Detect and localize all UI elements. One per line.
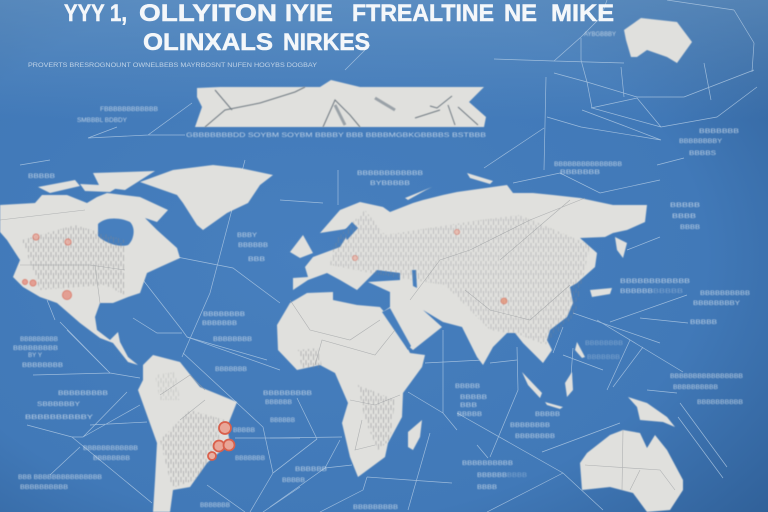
label group: north area: BBBBBB [238, 242, 268, 249]
continent: Sakhalin island [615, 237, 627, 258]
label group: indian ocean: BBBB [507, 472, 527, 479]
continent: Australia [580, 430, 683, 512]
continent: Arctic islands [38, 171, 155, 193]
continent: South America [138, 355, 237, 512]
label group: central column: BBBBB [233, 427, 255, 434]
marker: North America cluster [22, 234, 72, 300]
label group: right column: BBBBBBB [587, 354, 620, 361]
label group: north area: BBBBBBB [560, 169, 600, 176]
label group: north area: BBBBB [670, 202, 700, 209]
label group: left column: BBBBBBBBB [58, 390, 108, 397]
continent: British Isles [290, 235, 313, 258]
label group: right column: BBBBBBBBY [693, 300, 741, 307]
label group: right column: BBBBBBBBBB [673, 384, 718, 391]
label group: central column: BBBBBBB [215, 366, 247, 373]
label group: right column: BBBBB [653, 288, 683, 295]
title: IYIE [285, 0, 333, 27]
title: YYY 1, [64, 0, 127, 27]
label group: left column: BY Y [28, 352, 43, 359]
label group: north area: BBBBBBBBBBBB [357, 170, 423, 177]
label group: top area: GBBBBBBBDD SOYBM SOYBM BBBBY BBB BBBBMGBKGBBBBS BSTBBB [186, 132, 486, 139]
label group: top area: AYBGBBBY [584, 31, 617, 38]
label group: left column: BBBBBBBBB [13, 345, 58, 352]
label group: indian ocean: BBBBB [535, 411, 560, 418]
continent: Arctic Russia islands [405, 173, 493, 200]
title: NIRKES [283, 29, 370, 56]
label group: top area: BBBBBBB [699, 128, 739, 135]
marker: South America cluster [208, 422, 234, 460]
label group: central column: BBBBBBB [200, 502, 230, 509]
label group: north area: BBB [248, 256, 265, 263]
title: OLINXALS [143, 29, 273, 56]
label group: top area: BBBBS [689, 150, 717, 157]
label group: north area: BYBBBBB [370, 180, 410, 187]
label group: north area: BBBBB [28, 173, 55, 180]
label group: central column: BBBBB [282, 477, 305, 484]
label group: central column: BBBBBBBBB [263, 390, 312, 397]
label group: right column: BBBBBBBBBBBB [620, 278, 690, 285]
label group: indian ocean: BBB [460, 402, 477, 409]
water detail: Hudson Bay, Baltic, Caspian, Red Sea [98, 218, 417, 350]
label group: top area: BBBBBBBBBBBBBBB [554, 161, 622, 168]
label group: central column [200, 311, 398, 511]
label group: central column: BBBBBBBBB [353, 504, 398, 511]
map markers: red circles [22, 230, 507, 460]
title: FTREALTINE [352, 0, 494, 27]
continent: Africa [277, 292, 425, 477]
label group: north area: BBBB [672, 213, 696, 220]
banner map strip [195, 80, 486, 127]
label group: indian ocean: BBBB [477, 484, 497, 491]
continent: Eurasia [293, 185, 647, 365]
label group: top area: BBBBBBBBY [679, 138, 723, 145]
continent: Japan [590, 288, 612, 297]
label group: left column: BBBBBBBBBBY [25, 414, 94, 421]
label group: central column: BBBBBB [295, 466, 327, 473]
label group: right column: BBBBBBBBBBBBBBBB [670, 373, 743, 380]
continent: North America [0, 193, 180, 365]
map hatch texture clusters [22, 210, 590, 488]
label group: left column: BBBBBBBBBBBB [83, 445, 138, 452]
label group: left column [13, 336, 138, 491]
label group: central column: BBBBBBBB [213, 336, 252, 343]
label group: central column: BBBBBBBB [203, 311, 245, 318]
label group: indian ocean: BBBBBBBB [510, 422, 550, 429]
label group: indian ocean: BBBBB [460, 394, 487, 401]
label group: central column: BBBBBBB [235, 455, 265, 462]
label group: right column: BBBBB [690, 319, 717, 326]
label group: indian ocean: BBBBBB [477, 472, 507, 479]
label group: indian ocean: BBBBB [455, 383, 480, 390]
label group: central column: BBBBBBB [202, 320, 237, 327]
label group: indian ocean: BBBBBBBBBB [462, 460, 513, 467]
continent: Greenland [140, 165, 273, 230]
map border strokes [0, 198, 675, 490]
title: NE [504, 0, 537, 27]
label group: top area: SMBBBL BDBDY [77, 117, 128, 124]
marker: Eurasia cluster [352, 230, 507, 304]
label group: central column: BBBBBB [270, 417, 295, 424]
label group: left column: BBBBBBBBBB [20, 484, 68, 491]
label group: north area [28, 169, 700, 263]
label group: indian ocean: BBBBB [457, 411, 482, 418]
title [64, 0, 614, 56]
label group: north area: BBBY [237, 232, 258, 239]
inset: polar landmass [624, 18, 692, 63]
subtitle text: PROVERTS BRESROGNOUNT OWNELBEBS MAYRBOSNT NUFEN HOGYBS DOGBAY [28, 62, 318, 69]
label group: top area: FBBBBBBBBBBBB [100, 106, 158, 113]
label group: central column: BBBBBB [265, 399, 292, 406]
label group: indian ocean: BBBBBBBB [515, 433, 555, 440]
label group: indian ocean [455, 383, 560, 491]
label group: left column: BBBBBBBB [93, 455, 130, 462]
title: MIKE [551, 0, 614, 27]
label group: right column [585, 278, 750, 406]
label group: left column: BBBBBBBBB [20, 336, 58, 343]
label group: left column: BBB BBBBBBBBBBBBBBB [18, 474, 102, 481]
title: OLLYITON [139, 0, 277, 27]
label group: right column: BBBBBBBBBB [697, 399, 743, 406]
label group: left column: SBBBBBBY [37, 401, 81, 408]
label group: right column: BBBBBBBBBB [700, 290, 750, 297]
label group: north area: BBBB [680, 224, 700, 231]
continent: Southeast Asia islands [522, 342, 675, 427]
label group: left column: BBBBBBBB [22, 362, 63, 369]
label group: top area [77, 31, 739, 168]
banner terrain detail [205, 87, 478, 127]
label group: right column: BBBBBB [620, 288, 653, 295]
label group: right column: BBBBBBBB [585, 340, 623, 347]
continent: Madagascar [408, 420, 422, 450]
